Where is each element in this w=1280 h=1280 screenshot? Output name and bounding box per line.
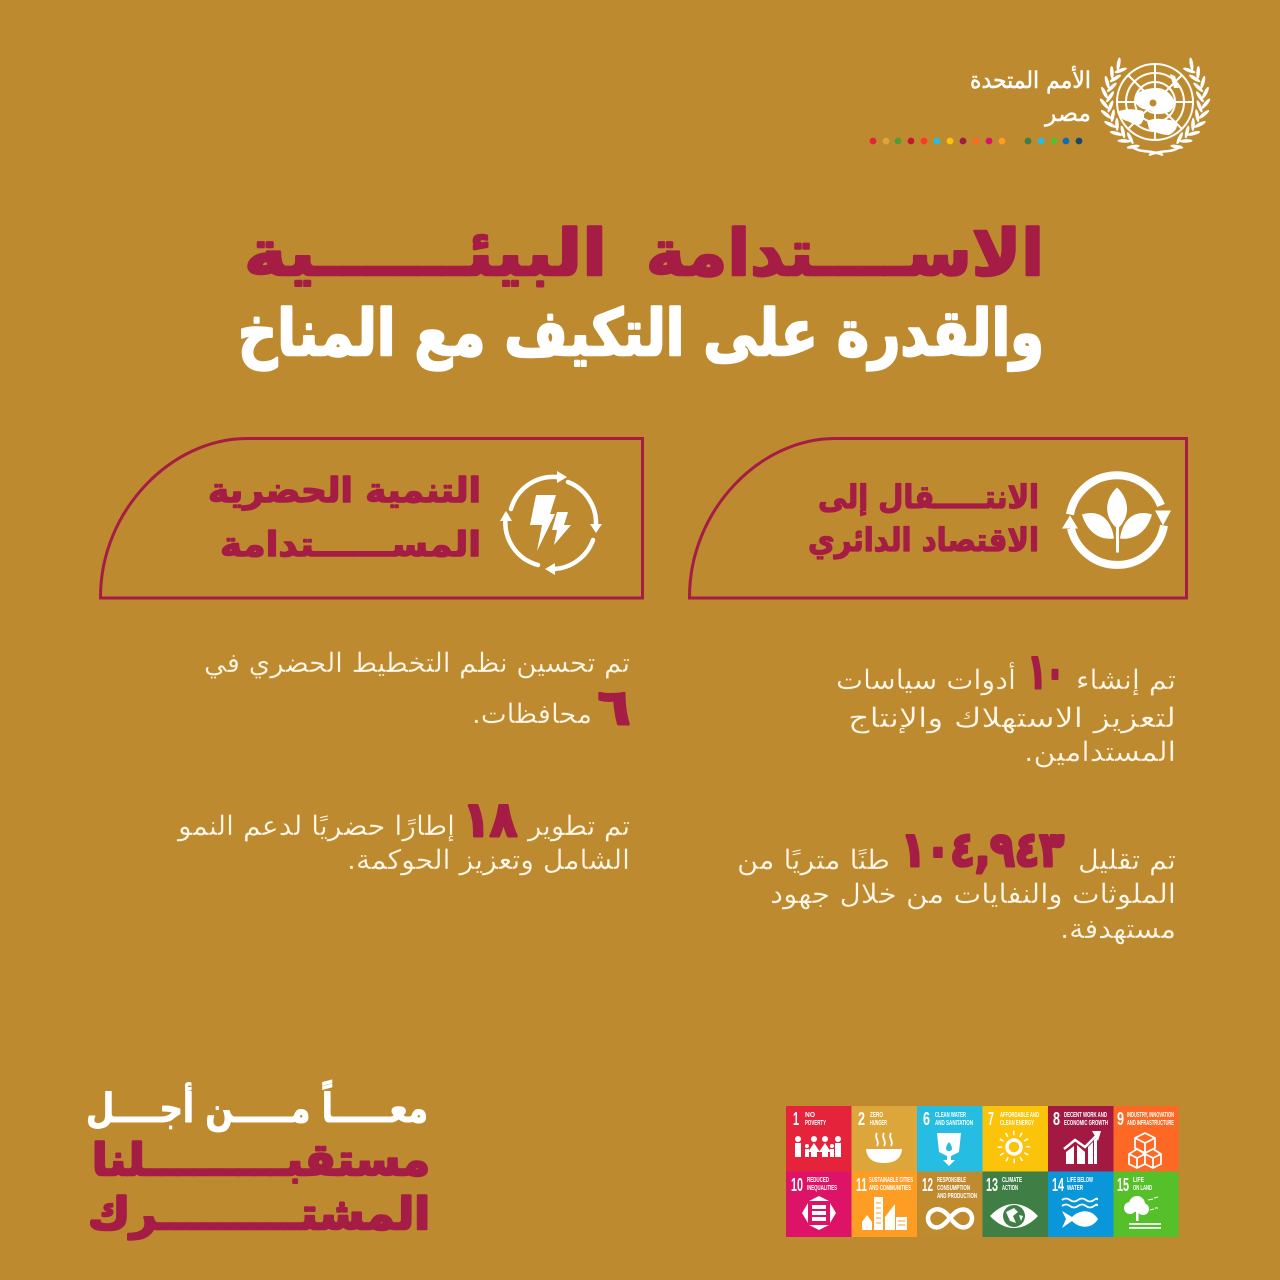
title line 1: البيئــــــية (244, 217, 607, 291)
text block: policy tools: أدوات سياسات (836, 661, 1016, 696)
coloured SDG dots (870, 138, 1082, 144)
SDG tile 10: REDUCED (807, 1177, 829, 1184)
SDG tile 6: CLEAN WATER (935, 1112, 966, 1119)
organisation name: مصر (1044, 101, 1091, 127)
panel: circular economy (690, 438, 1186, 598)
title line 2: والقدرة على التكيف مع المناخ (238, 297, 1044, 371)
SDG tile 7 (982, 1106, 1048, 1172)
text block: policy tools: لتعزيز الاستهلاك والإنتاج (848, 703, 1176, 734)
SDG tile 8: DECENT WORK AND (1064, 1112, 1107, 1119)
SDG tile 10 (786, 1172, 852, 1237)
SDG tile 9 (1114, 1106, 1178, 1172)
heading: circular economy: الاقتصاد الدائري (808, 521, 1039, 559)
SDG tile 1: NO (805, 1112, 816, 1119)
slogan (86, 1079, 430, 1240)
SDG goals grid (786, 1106, 1178, 1237)
SDG tile 2: HUNGER (870, 1120, 887, 1127)
text block: pollutants reduced: تم تقليل (1078, 845, 1176, 876)
text block: policy tools: تم إنشاء (1076, 665, 1176, 696)
SDG tile 8 (1048, 1106, 1114, 1172)
SDG tile 8: 8 (1053, 1109, 1060, 1129)
icon: plant in recycling ring (1062, 475, 1171, 565)
SDG tile 7: CLEAN ENERGY (1000, 1120, 1034, 1127)
number: 18: ١٨ (463, 792, 517, 848)
SDG tile 1 (786, 1106, 852, 1172)
text block: urban planning: تم تحسين نظم التخطيط الحضري في (204, 648, 630, 679)
text block: pollutants reduced: طنًا متريًا من (737, 845, 890, 876)
slogan line 3: المشتـــــــــرك (88, 1189, 430, 1240)
SDG tile 12: AND PRODUCTION (937, 1193, 977, 1200)
heading: urban development (208, 471, 481, 565)
heading: urban development: المســــــتدامة (220, 525, 481, 565)
SDG tile 12: RESPONSIBLE (937, 1177, 966, 1184)
heading: circular economy: الانتـــــقال إلى (818, 478, 1039, 517)
title line 1 (244, 217, 1044, 291)
icon: lightning in arrow ring (500, 471, 602, 575)
SDG tile 15: LIFE (1133, 1177, 1144, 1184)
title line 1: الاســــتدامة (646, 217, 1044, 291)
SDG tile 9: AND INFRASTRUCTURE (1127, 1120, 1174, 1127)
text block: urban planning (204, 648, 630, 736)
slogan line 1: معـــــاً مـــــن أجــــل (86, 1079, 428, 1132)
SDG tile 12 (917, 1172, 982, 1237)
SDG tile 12: CONSUMPTION (937, 1185, 970, 1192)
SDG tile 9: INDUSTRY, INNOVATION (1127, 1112, 1174, 1119)
SDG tile 1: POVERTY (805, 1120, 826, 1127)
number: 10: ١٠ (1028, 644, 1064, 700)
slogan line 2: مستقبـــــــــلنا (92, 1135, 430, 1186)
title (238, 217, 1044, 371)
SDG tile 14: 14 (1052, 1175, 1064, 1195)
SDG tile 6 (917, 1106, 982, 1172)
SDG tile 7: 7 (988, 1109, 994, 1129)
header: UN Egypt logo block (870, 57, 1211, 155)
text block: pollutants reduced: الملوثات والنفايات من خلال جهود (770, 879, 1176, 910)
SDG tile 11: SUSTAINABLE CITIES (869, 1177, 913, 1184)
SDG tile 10: 10 (791, 1175, 803, 1195)
SDG tile 9: 9 (1117, 1109, 1124, 1129)
number: 104,943: ١٠٤,٩٤٣ (901, 822, 1064, 878)
SDG tile 11: 11 (856, 1175, 867, 1195)
SDG tile 14: LIFE BELOW (1067, 1177, 1093, 1184)
SDG tile 11: AND COMMUNITIES (869, 1185, 911, 1192)
SDG tile 6: 6 (923, 1109, 930, 1129)
icon: UN emblem (1099, 57, 1211, 155)
SDG tile 13: ACTION (1002, 1185, 1018, 1192)
SDG tile 12: 12 (922, 1175, 933, 1195)
SDG tile 7: AFFORDABLE AND (1000, 1112, 1039, 1119)
organisation name: الأمم المتحدة (970, 66, 1091, 94)
SDG tile 2: 2 (858, 1109, 865, 1129)
SDG tile 13 (982, 1172, 1048, 1237)
number: 6: ٦ (598, 680, 630, 736)
text block: pollutants reduced: مستهدفة. (1060, 914, 1176, 945)
heading: circular economy (808, 478, 1039, 559)
SDG tile 15: 15 (1117, 1175, 1129, 1195)
SDG tile 14: WATER (1067, 1185, 1083, 1192)
text block: urban frameworks: تم تطوير (526, 811, 630, 842)
text block: pollutants reduced (737, 822, 1176, 945)
text block: urban frameworks: الشامل وتعزيز الحوكمة. (347, 845, 630, 876)
text block: urban planning: محافظات. (472, 699, 592, 730)
SDG tile 15 (1114, 1172, 1178, 1237)
text block: policy tools (836, 644, 1176, 768)
SDG tile 11 (852, 1172, 917, 1237)
SDG tile 14 (1048, 1172, 1114, 1237)
text block: policy tools: المستدامين. (1024, 737, 1176, 768)
SDG tile 8: ECONOMIC GROWTH (1064, 1120, 1108, 1127)
organisation name (970, 66, 1091, 127)
SDG tile 10: INEQUALITIES (807, 1185, 837, 1192)
panel: urban development (100, 438, 642, 598)
text block: urban frameworks (176, 792, 630, 876)
SDG tile 2 (852, 1106, 917, 1172)
SDG tile 15: ON LAND (1133, 1185, 1152, 1192)
SDG tile 13: CLIMATE (1002, 1177, 1022, 1184)
SDG tile 13: 13 (986, 1175, 998, 1195)
SDG tile 1: 1 (793, 1109, 799, 1129)
text block: urban frameworks: إطارًا حضريًا لدعم النمو (176, 811, 455, 842)
heading: urban development: التنمية الحضرية (208, 471, 481, 511)
SDG tile 2: ZERO (870, 1112, 883, 1119)
SDG tile 6: AND SANITATION (935, 1120, 973, 1127)
